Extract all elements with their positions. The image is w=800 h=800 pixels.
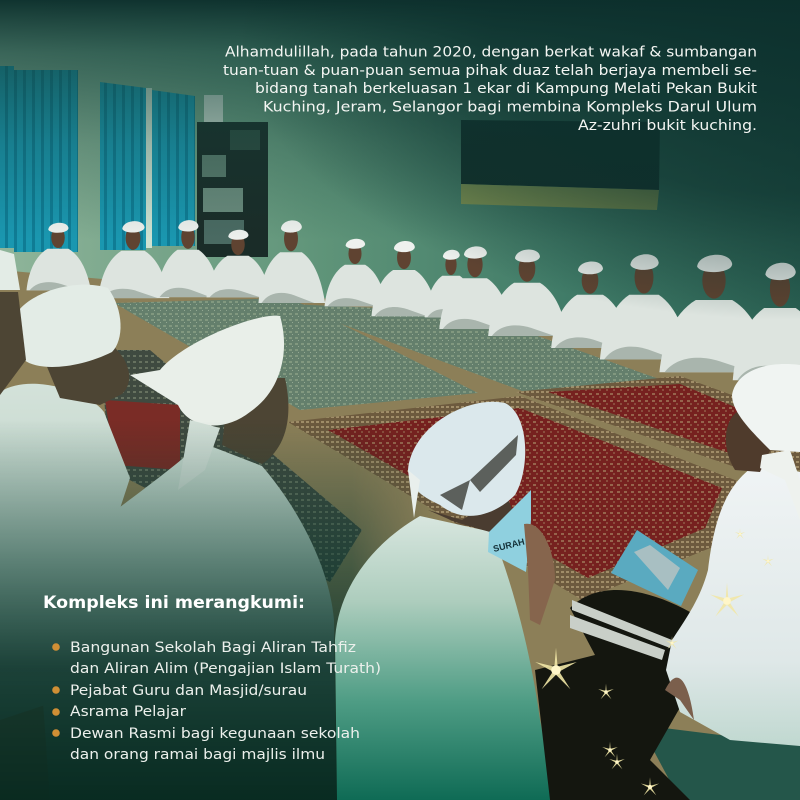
bookshelf	[197, 122, 268, 257]
intro paragraph: bidang tanah berkeluasan 1 ekar di Kampung Melati Pekan Bukit	[255, 81, 758, 97]
list item: school building	[52, 640, 381, 677]
dark floor bottom right	[640, 725, 800, 800]
sage carpet left	[114, 298, 478, 410]
top shading overlays	[0, 0, 800, 320]
list of facilities	[52, 640, 381, 763]
list item: main hall: dan orang ramai bagi majlis ilmu	[70, 747, 325, 763]
list item: dormitory: Asrama Pelajar	[70, 704, 186, 720]
foreground student left	[0, 250, 130, 720]
list item: main hall: Dewan Rasmi bagi kegunaan sekolah	[70, 726, 360, 742]
wall	[0, 0, 800, 340]
window curtains left	[0, 66, 78, 252]
list item: school building: dan Aliran Alim (Pengajian Islam Turath)	[70, 661, 381, 677]
list item: school building: Bangunan Sekolah Bagi Aliran Tahfiz	[70, 640, 356, 656]
intro paragraph: Kuching, Jeram, Selangor bagi membina Kompleks Darul Ulum	[263, 100, 757, 116]
intro paragraph: Alhamdulillah, pada tahun 2020, dengan berkat wakaf & sumbangan	[225, 44, 757, 60]
heading: Kompleks ini merangkumi: Kompleks ini merangkumi:	[43, 593, 305, 613]
wooden floor	[0, 270, 800, 800]
dark trousers	[535, 590, 690, 800]
book held: Surah Yasin: SURAH YA	[492, 533, 540, 554]
red carpet main	[288, 396, 740, 600]
list item: main hall	[52, 726, 360, 763]
foreground student centre with turban	[335, 402, 556, 800]
intro paragraph: Az-zuhri bukit kuching.	[578, 118, 757, 134]
book on lap	[611, 530, 698, 606]
intro paragraph	[223, 44, 758, 134]
wall banner	[461, 120, 660, 210]
hand holding book	[524, 524, 555, 625]
sage carpet right	[288, 304, 662, 391]
intro paragraph: tuan-tuan & puan-puan semua pihak duaz telah berjaya membeli se-	[223, 63, 757, 79]
red carpet left	[100, 350, 362, 582]
shading over left side	[0, 420, 440, 800]
row of seated students	[26, 220, 800, 380]
sparkles	[535, 528, 774, 795]
foreground student right	[665, 364, 800, 746]
list item: teachers office and mosque: Pejabat Guru dan Masjid/surau	[70, 683, 307, 699]
book held: Surah Yasin	[488, 490, 540, 572]
red carpet back	[516, 376, 800, 470]
window curtains middle	[100, 82, 195, 250]
foreground student centre-left	[40, 316, 336, 800]
speaker	[204, 95, 223, 122]
